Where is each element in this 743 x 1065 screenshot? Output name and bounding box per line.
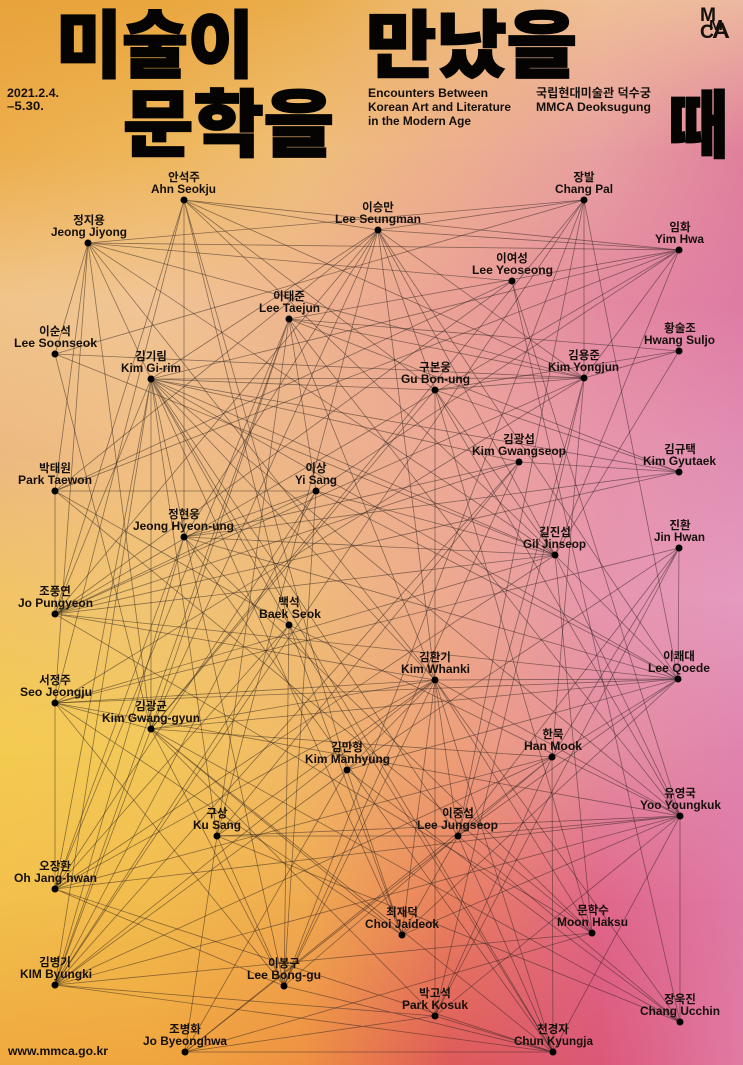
node: Hwang Suljo: 황술조 <box>664 320 696 336</box>
node: Moon Haksu <box>557 902 628 936</box>
node: Park Taewon: Park Taewon <box>18 473 92 487</box>
node: Jeong Hyeon-ung <box>133 506 234 540</box>
node: Oh Jang-hwan: Oh Jang-hwan <box>14 871 97 885</box>
exhibition dates <box>7 86 59 113</box>
venue: 국립현대미술관 덕수궁 <box>536 84 651 101</box>
node: Park Taewon <box>18 460 92 494</box>
node: Baek Seok: 백석 <box>278 594 300 610</box>
node: Kim Gwangseop: 김광섭 <box>503 431 535 447</box>
node: Hwang Suljo <box>644 320 715 354</box>
node: Han Mook: 한묵 <box>542 726 564 742</box>
node: Kim Gwang-gyun <box>102 698 200 732</box>
node: Jo Byeonghwa: 조병화 <box>169 1021 201 1037</box>
node: Kim Gi-rim <box>121 348 181 382</box>
exhibition dates: 2021.2.4. <box>7 86 59 100</box>
node: Yoo Youngkuk <box>640 785 721 820</box>
title: 때 <box>669 67 728 173</box>
node: Oh Jang-hwan: 오장환 <box>39 858 71 874</box>
MMCA logo: C <box>700 22 714 43</box>
title <box>56 0 728 173</box>
node: Ku Sang <box>193 805 241 840</box>
node: Lee Jungseop <box>417 805 498 840</box>
node: Yim Hwa <box>655 219 704 254</box>
English exhibition title: in the Modern Age <box>368 114 471 128</box>
node: Kim Gwang-gyun: Kim Gwang-gyun <box>102 711 200 725</box>
node: Kim Gi-rim: 김기림 <box>135 348 167 364</box>
node: Kim Gwang-gyun: 김광균 <box>135 698 167 714</box>
MMCA logo: A <box>712 18 730 43</box>
node: Moon Haksu: 문학수 <box>577 902 609 918</box>
node: Chang Pal: Chang Pal <box>555 182 613 196</box>
node: Kim Whanki: 김환기 <box>419 649 451 665</box>
node: Yi Sang <box>295 460 337 494</box>
node: Lee Bong-gu <box>247 955 321 990</box>
node: Jeong Hyeon-ung: 정현웅 <box>168 506 200 522</box>
node: Kim Gyutaek: 김규택 <box>664 441 696 457</box>
node: Baek Seok: Baek Seok <box>259 607 321 621</box>
node: Gil Jinseop: Gil Jinseop <box>523 537 586 551</box>
node: Kim Gi-rim: Kim Gi-rim <box>121 361 181 375</box>
node: Ahn Seokju <box>151 169 216 204</box>
node: Kim Whanki <box>401 649 470 684</box>
node: Han Mook <box>524 726 582 760</box>
node: Lee Taejun: 이태준 <box>273 288 305 304</box>
node: Chang Ucchin: Chang Ucchin <box>640 1004 720 1018</box>
node: Gil Jinseop: 길진섭 <box>539 524 571 540</box>
node: Yi Sang: 이상 <box>305 460 327 476</box>
node: Jin Hwan <box>654 517 705 552</box>
node: Lee Yeoseong: 이여성 <box>496 250 528 266</box>
node: Ku Sang: 구상 <box>206 805 228 821</box>
node: Kim Yongjun: Kim Yongjun <box>548 360 619 374</box>
node: Jeong Jiyong: 정지용 <box>73 212 105 228</box>
node: Jeong Hyeon-ung: Jeong Hyeon-ung <box>133 519 234 533</box>
node: Chun Kyungja <box>514 1021 593 1056</box>
MMCA logo: M <box>709 17 723 34</box>
MMCA logo: M <box>700 5 716 26</box>
node: Gu Bon-ung <box>401 359 470 394</box>
node: Oh Jang-hwan <box>14 858 97 892</box>
node: Yoo Youngkuk: Yoo Youngkuk <box>640 798 721 812</box>
node: Seo Jeongju <box>20 672 92 706</box>
English exhibition title: Korean Art and Literature <box>368 100 511 114</box>
website: www.mmca.go.kr <box>7 1044 108 1058</box>
node: Jo Byeonghwa <box>143 1021 227 1056</box>
English exhibition title <box>368 86 511 128</box>
node: Chun Kyungja: Chun Kyungja <box>514 1034 593 1048</box>
node: Lee Seungman <box>335 199 421 234</box>
node: Park Taewon: 박태원 <box>39 460 71 476</box>
node: Lee Bong-gu: 이봉구 <box>268 955 300 971</box>
venue: MMCA Deoksugung <box>536 100 651 114</box>
node: Lee Soonseok <box>14 323 97 358</box>
network lines connecting artists and writers <box>55 200 680 1052</box>
node: Lee Qoede: 이쾌대 <box>663 648 695 664</box>
MMCA logo <box>700 5 730 43</box>
node: Lee Seungman: 이승만 <box>362 199 394 215</box>
node: Lee Jungseop: Lee Jungseop <box>417 818 498 832</box>
node: Chang Ucchin <box>640 991 720 1026</box>
node: Chun Kyungja: 천경자 <box>537 1021 569 1037</box>
node: Kim Yongjun <box>548 347 619 382</box>
node: Lee Yeoseong: Lee Yeoseong <box>472 263 553 277</box>
node: KIM Byungki: 김병기 <box>39 954 71 970</box>
node: KIM Byungki <box>20 954 92 988</box>
node: Chang Ucchin: 장욱진 <box>664 991 696 1007</box>
node: Lee Taejun: Lee Taejun <box>259 301 320 315</box>
node: Jo Byeonghwa: Jo Byeonghwa <box>143 1034 227 1048</box>
node: Lee Qoede: Lee Qoede <box>648 661 710 675</box>
node: Yim Hwa: Yim Hwa <box>655 232 704 246</box>
node: Kim Manhyung: Kim Manhyung <box>305 752 390 766</box>
node: Ahn Seokju: 안석주 <box>168 169 200 185</box>
node: Kim Gwangseop <box>472 431 566 466</box>
node: Baek Seok <box>259 594 321 628</box>
node: Lee Soonseok: Lee Soonseok <box>14 336 97 350</box>
node: Lee Qoede <box>648 648 710 682</box>
node: Kim Manhyung: 김만형 <box>331 739 363 755</box>
node: Gu Bon-ung: 구본웅 <box>419 359 451 375</box>
node: Lee Taejun <box>259 288 320 322</box>
node: Choi Jaideok <box>365 904 439 938</box>
node: KIM Byungki: KIM Byungki <box>20 967 92 981</box>
node: Jin Hwan: 진환 <box>669 517 691 533</box>
node: Kim Gyutaek: Kim Gyutaek <box>643 454 716 468</box>
node: Chang Pal <box>555 169 613 204</box>
node: Choi Jaideok: Choi Jaideok <box>365 917 439 931</box>
node: Lee Soonseok: 이순석 <box>39 323 71 339</box>
node: Park Kosuk <box>402 985 468 1020</box>
node: Lee Yeoseong <box>472 250 553 284</box>
node: Choi Jaideok: 최재덕 <box>386 904 418 920</box>
node: Jeong Jiyong <box>51 212 127 246</box>
title: 문학을 <box>123 66 334 172</box>
node: Jo Pungyeon: 조풍연 <box>39 583 71 599</box>
venue <box>536 84 651 114</box>
exhibition dates: –5.30. <box>7 99 44 113</box>
node: Gu Bon-ung: Gu Bon-ung <box>401 372 470 386</box>
node: Lee Jungseop: 이중섭 <box>442 805 474 821</box>
node: Park Kosuk: Park Kosuk <box>402 998 468 1012</box>
node: Park Kosuk: 박고석 <box>419 985 451 1001</box>
node: Lee Bong-gu: Lee Bong-gu <box>247 968 321 982</box>
node: Gil Jinseop <box>523 524 586 558</box>
node: Ahn Seokju: Ahn Seokju <box>151 182 216 196</box>
node: Jo Pungyeon <box>18 583 93 618</box>
node: Kim Whanki: Kim Whanki <box>401 662 470 676</box>
English exhibition title: Encounters Between <box>368 86 488 100</box>
node: Ku Sang: Ku Sang <box>193 818 241 832</box>
node: Chang Pal: 장발 <box>573 169 595 185</box>
node: Kim Gyutaek <box>643 441 716 476</box>
node: Hwang Suljo: Hwang Suljo <box>644 333 715 347</box>
node: Moon Haksu: Moon Haksu <box>557 915 628 929</box>
node: Jeong Jiyong: Jeong Jiyong <box>51 225 127 239</box>
node: Kim Gwangseop: Kim Gwangseop <box>472 444 566 458</box>
node: Yim Hwa: 임화 <box>669 219 691 235</box>
node: Kim Yongjun: 김용준 <box>568 347 600 363</box>
node: Jo Pungyeon: Jo Pungyeon <box>18 596 93 610</box>
node: Seo Jeongju: Seo Jeongju <box>20 685 92 699</box>
node: Yi Sang: Yi Sang <box>295 473 337 487</box>
node: Han Mook: Han Mook <box>524 739 582 753</box>
node: Kim Manhyung <box>305 739 390 774</box>
node: Lee Seungman: Lee Seungman <box>335 212 421 226</box>
node: Seo Jeongju: 서정주 <box>39 672 71 688</box>
node: Yoo Youngkuk: 유영국 <box>664 785 696 801</box>
node: Jin Hwan: Jin Hwan <box>654 530 705 544</box>
